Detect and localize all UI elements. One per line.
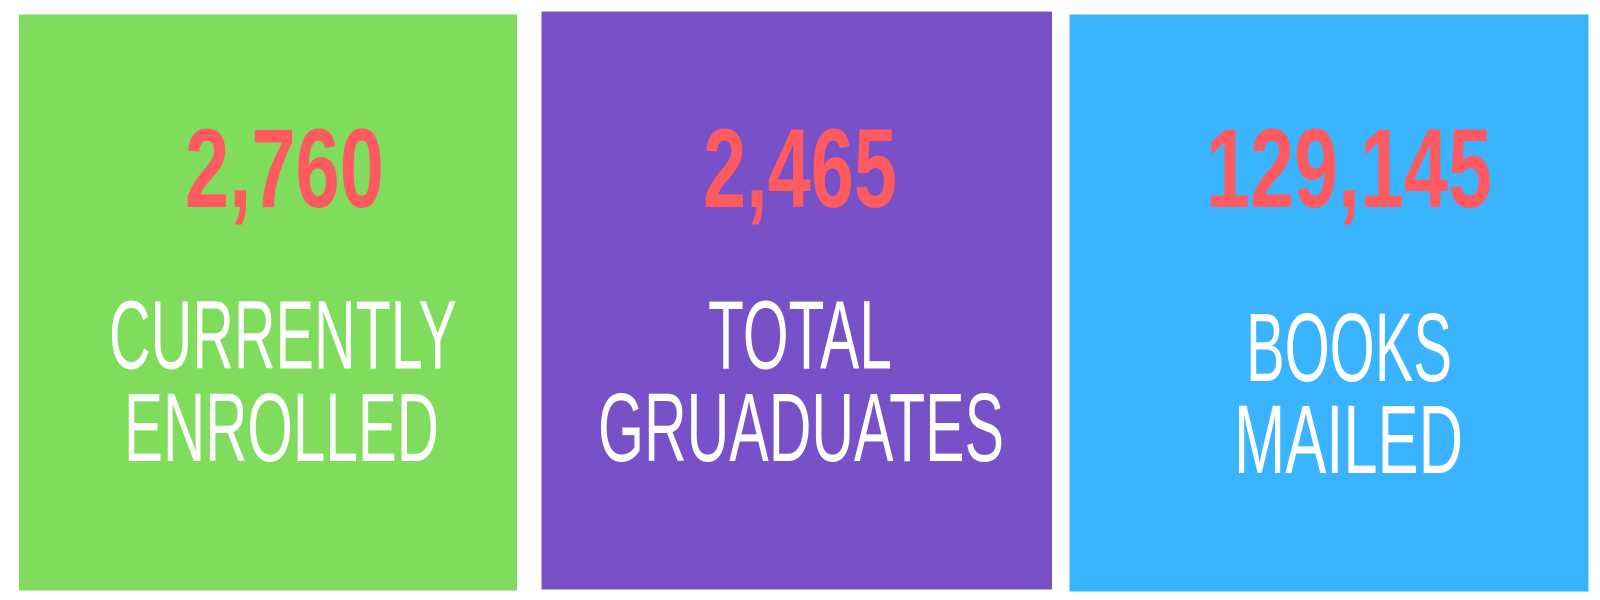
panel background: green xyxy=(19,14,517,590)
label: currently enrolled xyxy=(109,280,457,482)
label: total gruaduates xyxy=(598,280,1004,482)
label: books mailed: BOOKS xyxy=(1246,293,1452,402)
number: 2,465: 2,465 xyxy=(703,106,897,231)
panel: currently enrolled xyxy=(19,14,517,590)
panel: books mailed xyxy=(1070,14,1588,592)
panel background: blue xyxy=(1070,14,1588,592)
number: 2,760: 2,760 xyxy=(185,106,384,231)
panel background: purple xyxy=(542,12,1052,590)
label: books mailed: MAILED xyxy=(1234,385,1463,494)
label: currently enrolled: CURRENTLY xyxy=(109,280,457,390)
label: total gruaduates: TOTAL xyxy=(708,280,892,390)
number: 129,145: 129,145 xyxy=(1206,106,1492,231)
panel: total graduates xyxy=(542,12,1052,590)
label: currently enrolled: ENROLLED xyxy=(124,373,439,482)
label: books mailed xyxy=(1234,293,1463,494)
label: total gruaduates: GRUADUATES xyxy=(598,373,1004,482)
